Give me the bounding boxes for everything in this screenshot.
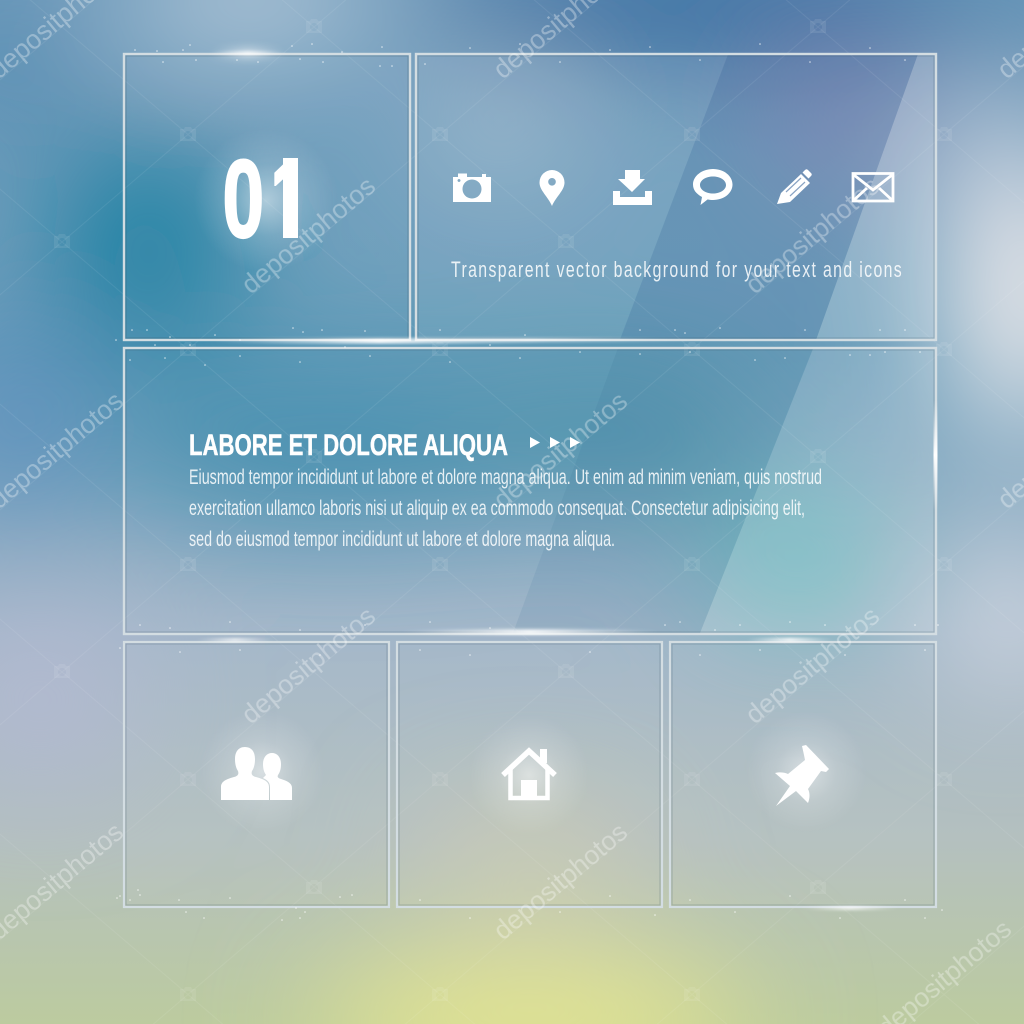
- icon: download: [613, 170, 652, 205]
- depositphotos watermarks: depositphotos: [235, 601, 381, 730]
- body text: [189, 466, 822, 551]
- depositphotos watermarks: depositphotos: [739, 171, 885, 300]
- depositphotos watermarks: depositphotos: [235, 171, 381, 300]
- panel: text tile: [124, 348, 936, 634]
- glitter specks: [116, 44, 942, 920]
- depositphotos watermarks: depositphotos: [739, 601, 885, 730]
- depositphotos watermarks: depositphotos: [487, 817, 633, 946]
- icon: push pin: [775, 745, 829, 806]
- body text: sed do eiusmod tempor incididunt ut labore et dolore magna aliqua.: [189, 528, 615, 551]
- panel: pin tile: [670, 642, 936, 907]
- panel: icon tile: [416, 54, 936, 340]
- number glow: [194, 128, 338, 272]
- glass reflection band: [417, 54, 935, 633]
- people glow: [200, 710, 324, 834]
- panel: number tile: [124, 54, 410, 340]
- icon: envelope: [853, 174, 893, 201]
- panel: people tile: [124, 642, 389, 907]
- icon: speech bubble: [693, 169, 732, 205]
- caption: Transparent vector background for your text and icons: [451, 259, 902, 283]
- panel: home tile: [397, 642, 662, 907]
- heading: LABORE ET DOLORE ALIQUA: [189, 429, 508, 462]
- lens flares: [195, 49, 938, 910]
- icon: camera: [453, 174, 491, 202]
- number 01: [224, 158, 298, 240]
- home glow: [469, 715, 589, 835]
- pin glow: [746, 712, 866, 832]
- icon: people: [221, 747, 292, 800]
- icon: triple arrows: [530, 437, 580, 448]
- depositphotos watermarks: depositphotos: [487, 386, 633, 515]
- icon: pencil: [777, 169, 812, 204]
- number 01: 0: [222, 138, 264, 260]
- number 01: 1: [270, 138, 312, 260]
- icon: house: [503, 749, 555, 800]
- icon: map pin: [540, 170, 564, 206]
